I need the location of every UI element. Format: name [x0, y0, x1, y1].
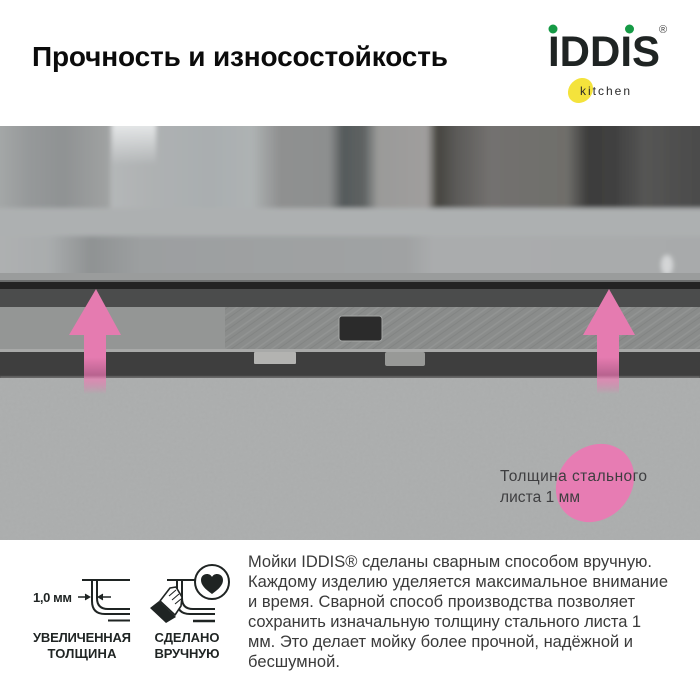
badge label: УВЕЛИЧЕННАЯ [33, 630, 131, 645]
right clip [385, 352, 425, 366]
wall surface [0, 378, 700, 540]
arrow: left [69, 289, 121, 395]
callout text: Толщина стального [500, 468, 647, 485]
logo wordmark: IDDIS [548, 28, 660, 76]
thickness label: 1,0 мм [33, 590, 72, 605]
left clip [254, 352, 296, 364]
sink profile icon [167, 580, 215, 621]
body text: сохранить изначальную толщину стального листа 1 [248, 613, 641, 631]
body text: мм. Это делает мойку более прочной, надёжной и [248, 633, 633, 651]
badge label: СДЕЛАНО [154, 630, 220, 645]
photo: sink edge close-up [0, 110, 700, 540]
logo green dots [548, 24, 634, 34]
logo registered mark: ® [659, 24, 667, 36]
badge: handmade: ВРУЧНУЮ [154, 646, 220, 661]
heart icon [195, 565, 229, 599]
sink rim [0, 273, 700, 379]
sink profile icon [78, 580, 130, 620]
logo yellow blob [563, 73, 598, 108]
arrow: right [583, 289, 635, 395]
pink blob [540, 428, 650, 538]
logo: IDDIS kitchen [548, 24, 667, 108]
body text: Мойки IDDIS® сделаны сварным способом вручную. [248, 553, 652, 571]
body text: бесшумной. [248, 653, 340, 671]
title: Прочность и износостойкость [32, 41, 448, 72]
badge: increased thickness: ТОЛЩИНА [48, 646, 117, 661]
callout: sheet thickness: листа 1 мм [500, 489, 580, 506]
badge: increased thickness [33, 580, 131, 661]
blurred background bands [0, 126, 700, 273]
mounting slot [339, 316, 382, 341]
body text [248, 553, 668, 671]
body text: Каждому изделию уделяется максимальное внимание [248, 573, 668, 591]
badge: handmade [150, 565, 229, 661]
body text: и время. Сварной способ производства позволяет [248, 593, 635, 611]
hand icon [150, 587, 182, 623]
callout: sheet thickness [500, 428, 650, 538]
logo kitchen word: kitchen [580, 84, 630, 98]
